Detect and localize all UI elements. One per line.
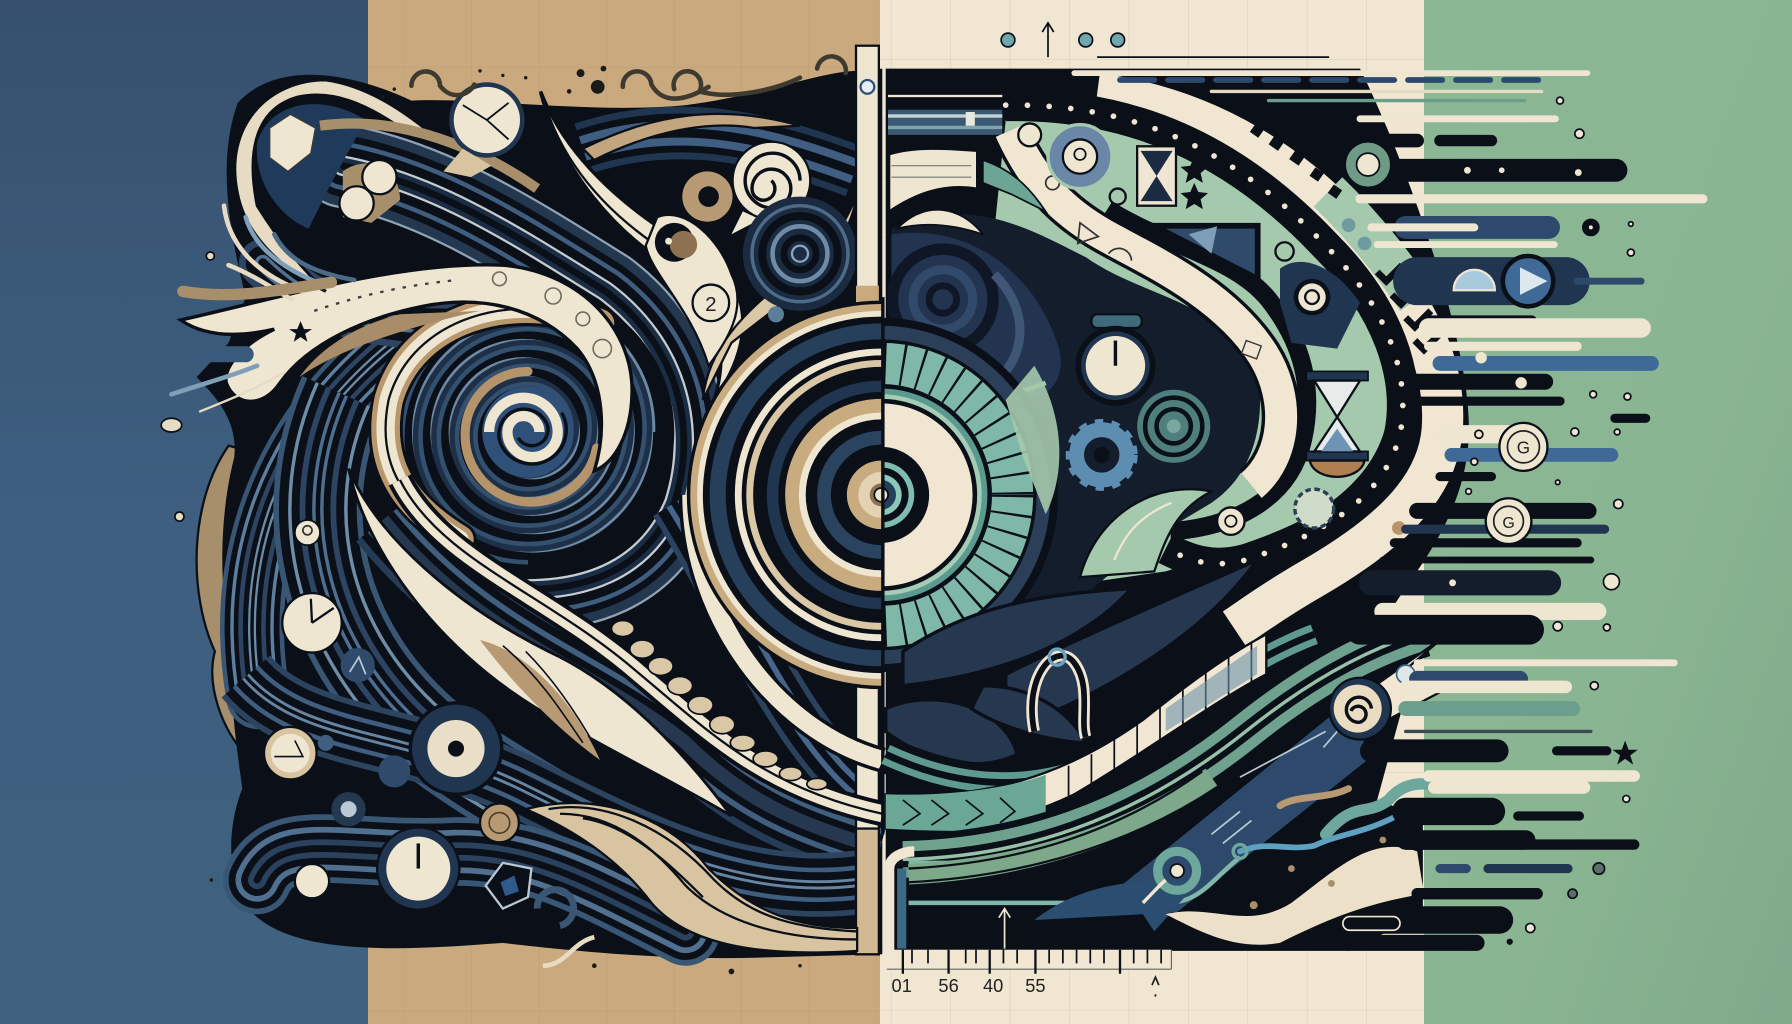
flowing strands: top band (343, 166, 684, 589)
inner black curve (1107, 209, 1307, 531)
small badge near tail (1217, 507, 1245, 535)
cream leaf: upper right (541, 91, 743, 400)
center pin (874, 488, 888, 502)
small dark discs (318, 735, 410, 826)
stars (1181, 157, 1208, 209)
icon: cream flower (270, 114, 315, 171)
flowing strands: upper right (583, 133, 855, 171)
small blue dot (768, 306, 784, 322)
clock: bottom (377, 827, 459, 910)
cream grid band (886, 634, 1266, 831)
icon: twin discs (339, 160, 400, 223)
decorative swirl (731, 142, 810, 234)
tag: number: 2 (705, 293, 717, 316)
S ribbon cream (400, 480, 882, 814)
cream disc bottom (295, 864, 329, 898)
ruler labels: 01 (892, 975, 912, 996)
green lower bands (903, 632, 1423, 859)
flowing strands: bottom bundle (257, 849, 686, 931)
dots in streaks (1411, 167, 1582, 688)
navy sheen panel (1034, 880, 1200, 931)
ruler labels (892, 975, 1046, 996)
inner cream band (1010, 130, 1281, 486)
dark compass icon (341, 648, 375, 682)
tan dot (1392, 521, 1406, 535)
gear disc (410, 703, 502, 794)
flowing strands: left sweep (252, 343, 394, 697)
ruler labels: 56 (938, 975, 959, 996)
clock: mid left (282, 593, 342, 653)
navy diagonal bar (1097, 709, 1377, 914)
flowing strands: mid to lower diagonal (318, 394, 697, 909)
top row marks on cream (1001, 23, 1329, 57)
tan block (443, 149, 491, 177)
ruler (887, 950, 1171, 974)
checkmarks (1377, 265, 1440, 350)
cream leaf lower (349, 469, 731, 816)
blue dots (1342, 218, 1371, 250)
spiral outer cream arm (386, 309, 600, 539)
star on green (1613, 741, 1638, 765)
loop icon (1032, 649, 1086, 737)
dark leaves lower (886, 560, 1257, 764)
center divider (881, 297, 885, 834)
flowing strands: lower bundle (246, 677, 859, 885)
small pin icon (295, 520, 320, 545)
outer cream sweep (691, 495, 882, 760)
green band under leaves (886, 634, 1314, 782)
navy concentric disc (743, 197, 857, 311)
brown eye swirl (682, 171, 733, 222)
triangle panel (1143, 223, 1261, 288)
dotted black band (1006, 105, 1403, 564)
top left stripes block (888, 71, 1105, 135)
badge: G mid (1499, 423, 1547, 471)
outer cream band (1097, 94, 1443, 629)
squares on band (1250, 123, 1342, 199)
background: green panel (1424, 0, 1792, 1024)
lower left frame (889, 851, 1240, 971)
big rings: right half (884, 318, 1058, 672)
vertical bar (856, 46, 879, 954)
clock: lower left small (264, 727, 317, 779)
spiral centre (482, 386, 579, 478)
small caret mark (1152, 977, 1159, 997)
tag: number (693, 285, 729, 321)
badge: G low (1486, 498, 1531, 544)
flowing strands: upper fan (263, 263, 537, 326)
tan hook strand (320, 123, 537, 189)
teal squiggles (1233, 779, 1469, 858)
navy swirl (891, 233, 1061, 400)
green interior field (983, 120, 1390, 583)
right dark base (886, 69, 1469, 951)
teal swirl disc (1137, 390, 1210, 463)
fan of light strands (171, 206, 354, 411)
patterned knot (1295, 489, 1334, 528)
scattered dots on green (1466, 97, 1634, 944)
badge on pill: disc (1345, 142, 1391, 187)
background: tan panel (368, 0, 880, 1024)
book pages (889, 149, 1046, 234)
background: cream panel (880, 0, 1424, 1024)
spiral cap (1329, 678, 1391, 739)
green accents right of rings (1006, 366, 1059, 514)
spiral inner tan ring (465, 371, 597, 502)
flowing strands: under big rings (674, 503, 857, 789)
green stripes bottom left (909, 771, 1218, 882)
left tan edge shape (197, 446, 297, 754)
dial badge top (1048, 125, 1112, 189)
green tail (1080, 489, 1211, 577)
gear (1070, 423, 1134, 487)
bottom swirl (537, 890, 594, 966)
hourglass: top (1137, 146, 1176, 206)
hourglass: large (1306, 371, 1368, 477)
stray marks on blue (161, 252, 214, 521)
top swirls on tan (411, 56, 846, 99)
tan coin (480, 803, 519, 842)
tan ribbon: upper right (583, 114, 800, 160)
small rings top (1018, 123, 1294, 261)
gem icon (486, 863, 531, 909)
background: blue panel (0, 0, 368, 1024)
player buttons (1454, 256, 1553, 306)
flowing strands: right diagonal (383, 520, 880, 848)
big rings: left half (686, 300, 882, 690)
dark dial panel (1280, 262, 1360, 349)
cream ribbon with dots (181, 265, 632, 471)
badge: G low: G (1502, 515, 1515, 532)
ruler labels: 55 (1025, 975, 1046, 996)
cream wave (1166, 837, 1424, 945)
tan ribbon: toward rings (703, 194, 857, 400)
beads row (611, 621, 827, 790)
ruler labels: 40 (983, 975, 1003, 996)
speckle dots (210, 66, 802, 974)
inner dark interior (891, 214, 1260, 657)
arrow head cream (1343, 635, 1446, 731)
main spiral (382, 286, 674, 578)
left dark swirl mass (197, 69, 882, 958)
right streaks (1074, 73, 1703, 943)
teal scroll (1143, 851, 1197, 903)
streak pill outline (1343, 917, 1400, 930)
stopwatch (1075, 314, 1155, 406)
clock: top (449, 82, 525, 158)
ruler arrow (999, 909, 1010, 949)
wave: lower tan stripes (526, 803, 857, 952)
cream teardrop frame (646, 215, 738, 366)
upper left navy disc (257, 104, 366, 229)
badge: G mid: G (1517, 438, 1530, 458)
upper left cream hook (235, 80, 429, 291)
